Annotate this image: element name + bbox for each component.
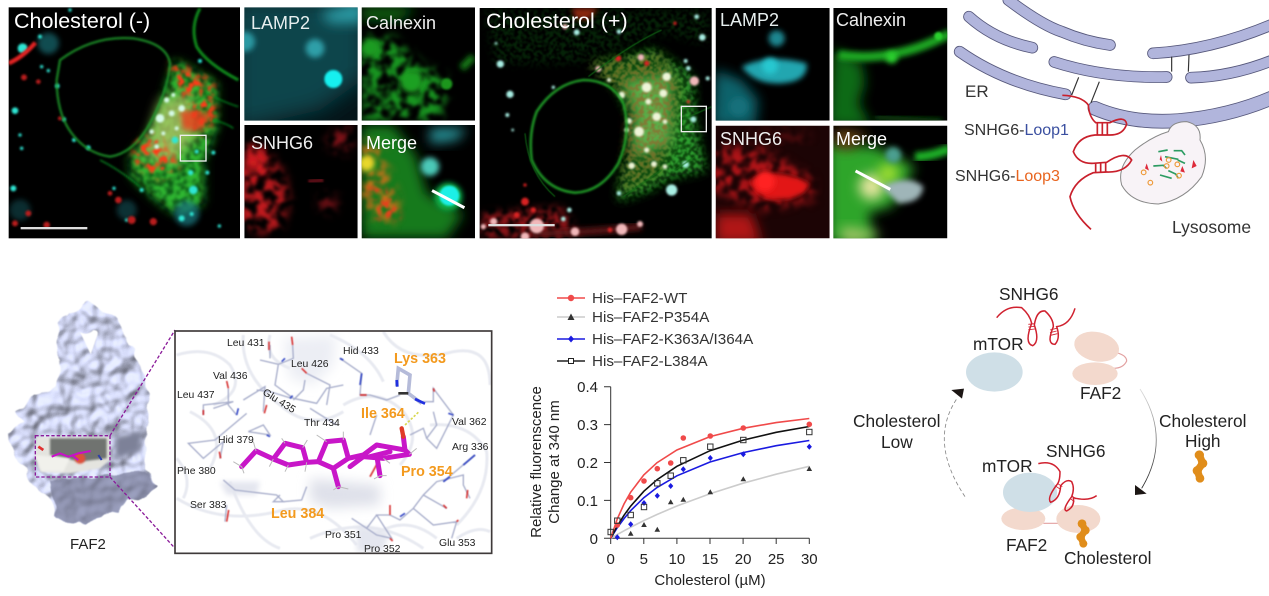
residue labels: Hid 379	[218, 435, 254, 446]
diagram labels: SNHG6	[1046, 441, 1106, 461]
label: SNHG6-Loop1: SNHG6-Loop1	[964, 122, 1069, 139]
zoom indicator lines	[35, 330, 175, 548]
label: ER: ER	[965, 82, 989, 101]
axis titles: Cholesterol (µM)	[654, 572, 766, 589]
label: LAMP2 (+): LAMP2	[720, 10, 779, 30]
key residue labels: Ile 364	[361, 406, 405, 422]
Lys 363 stick	[397, 368, 425, 425]
y tick labels: 0.3	[577, 417, 598, 434]
key residue labels	[271, 351, 453, 522]
panel: LAMP2 zoom (-)	[244, 7, 358, 121]
panel: FAF2 cholesterol docking close-up	[175, 331, 492, 553]
legend: His–FAF2-K363A/I364A	[592, 331, 754, 348]
protein surface	[8, 304, 158, 526]
legend: His–FAF2-WT	[592, 290, 687, 307]
x tick labels	[607, 551, 818, 568]
panel: Calnexin zoom (-)	[361, 7, 475, 121]
label: LAMP2: LAMP2	[251, 13, 310, 33]
bottom state: mTOR ellipse	[1003, 473, 1057, 512]
panel: Cholesterol (-) overview	[9, 7, 240, 238]
diagram labels: mTOR	[982, 456, 1033, 476]
label: SNHG6: SNHG6	[251, 133, 313, 153]
tunnel hole	[80, 330, 98, 354]
x tick labels: 25	[768, 551, 785, 568]
label: SNHG6 (+): SNHG6	[720, 129, 782, 149]
label: Merge: Merge	[366, 133, 417, 153]
residue labels: Glu 435	[260, 387, 297, 416]
arrow: cholesterol high	[1135, 389, 1156, 495]
key residue labels: Pro 354	[401, 464, 453, 480]
diagram labels: High	[1185, 431, 1221, 451]
data points: L384A	[608, 429, 812, 535]
diagram: mTOR / FAF2 / SNHG6 cholesterol cycle	[944, 307, 1207, 548]
axes	[604, 387, 809, 544]
arrow: cholesterol low	[944, 389, 965, 497]
figure group: Cholesterol (+) micrographs	[480, 8, 950, 243]
diagram: ER and lysosome contact	[960, 0, 1269, 229]
panel: SNHG6 zoom (-)	[240, 125, 358, 238]
bottom state: FAF2	[1001, 505, 1100, 533]
key residue labels: Lys 363	[394, 351, 446, 367]
binding cavity	[35, 437, 110, 473]
x tick labels: 10	[669, 551, 685, 568]
bottom state: SNHG6 RNA	[1038, 463, 1097, 511]
y axis title line 1: Relative fluorenscence	[528, 386, 545, 538]
label: Lysosome: Lysosome	[1172, 217, 1251, 237]
chart: fluorescence binding curves	[528, 290, 818, 589]
FAF2 surface structure	[8, 304, 175, 548]
y tick labels	[577, 379, 598, 548]
top state: SNHG6 RNA	[997, 307, 1075, 346]
y tick labels: 0.4	[577, 379, 598, 396]
panel: SNHG6 zoom (+)	[712, 126, 830, 243]
x tick labels: 5	[640, 551, 648, 568]
legend	[557, 290, 754, 370]
residue labels: Leu 426	[291, 359, 329, 370]
label: Cholesterol (-): Cholesterol (-)	[14, 9, 150, 33]
diagram labels: mTOR	[973, 334, 1024, 354]
diagram labels: Cholesterol	[853, 411, 940, 431]
residue labels: Pro 351	[325, 530, 362, 541]
diagram labels: SNHG6	[999, 284, 1059, 304]
top state: FAF2	[1071, 328, 1127, 385]
panel: Calnexin zoom (+)	[833, 8, 948, 121]
diagram labels: FAF2	[1080, 383, 1121, 403]
residue labels: Glu 353	[439, 538, 476, 549]
residue labels: Val 362	[452, 417, 487, 428]
residue labels: Hid 433	[343, 346, 379, 357]
side chain sticks	[188, 345, 475, 538]
cholesterol molecule free	[1193, 450, 1207, 483]
y tick labels: 0.2	[577, 455, 598, 472]
label: FAF2: FAF2	[70, 536, 106, 553]
lysosome	[1121, 122, 1205, 204]
residue labels: Ser 383	[190, 500, 227, 511]
data points: WT	[614, 422, 812, 528]
diagram labels	[853, 284, 1246, 568]
diagram labels: Low	[881, 432, 913, 452]
y axis title line 2: Change at 340 nm	[546, 400, 563, 524]
residue labels: Phe 380	[177, 466, 216, 477]
ER membrane sheets	[960, 0, 1269, 121]
label: Calnexin (+): Calnexin	[836, 10, 906, 30]
cholesterol ligand	[242, 437, 409, 487]
label: Merge (+): Merge	[836, 129, 887, 149]
legend: His–FAF2-L384A	[592, 353, 709, 370]
panel: Merge zoom (-)	[359, 125, 475, 238]
residue labels: Leu 431	[227, 338, 265, 349]
background ribbons	[177, 332, 490, 548]
diagram labels: FAF2	[1006, 535, 1047, 555]
x tick labels: 0	[607, 551, 615, 568]
panel: LAMP2 zoom (+)	[712, 8, 830, 127]
label: Calnexin: Calnexin	[366, 13, 436, 33]
x tick labels: 15	[702, 551, 718, 568]
residue labels: Val 436	[213, 371, 248, 382]
SNHG6 RNA strand	[1062, 95, 1132, 229]
top state: mTOR ellipse	[966, 352, 1023, 392]
residue labels: Thr 434	[304, 418, 340, 429]
residue labels: Pro 352	[364, 544, 401, 555]
panel: Cholesterol (+) overview	[480, 8, 712, 241]
panel: Merge zoom (+)	[828, 126, 950, 243]
x tick labels: 20	[735, 551, 751, 568]
y tick labels: 0	[590, 531, 598, 548]
figure group: Cholesterol (-) micrographs	[9, 0, 475, 238]
y tick labels: 0.1	[577, 493, 598, 510]
label: Cholesterol (+): Cholesterol (+)	[486, 9, 628, 33]
x tick labels: 30	[801, 551, 818, 568]
residue labels	[177, 338, 489, 555]
data points: K363A/I364A	[615, 444, 812, 540]
residue labels: Leu 437	[177, 390, 215, 401]
fitted curves	[611, 418, 809, 538]
label: SNHG6-Loop3: SNHG6-Loop3	[955, 168, 1060, 185]
diagram labels: Cholesterol	[1064, 548, 1151, 568]
data points: P354A	[628, 466, 812, 536]
diagram labels: Cholesterol	[1159, 411, 1246, 431]
legend: His–FAF2-P354A	[592, 309, 710, 326]
residue labels: Arg 336	[452, 442, 489, 453]
key residue labels: Leu 384	[271, 506, 324, 522]
cholesterol molecule in complex	[1076, 519, 1090, 548]
